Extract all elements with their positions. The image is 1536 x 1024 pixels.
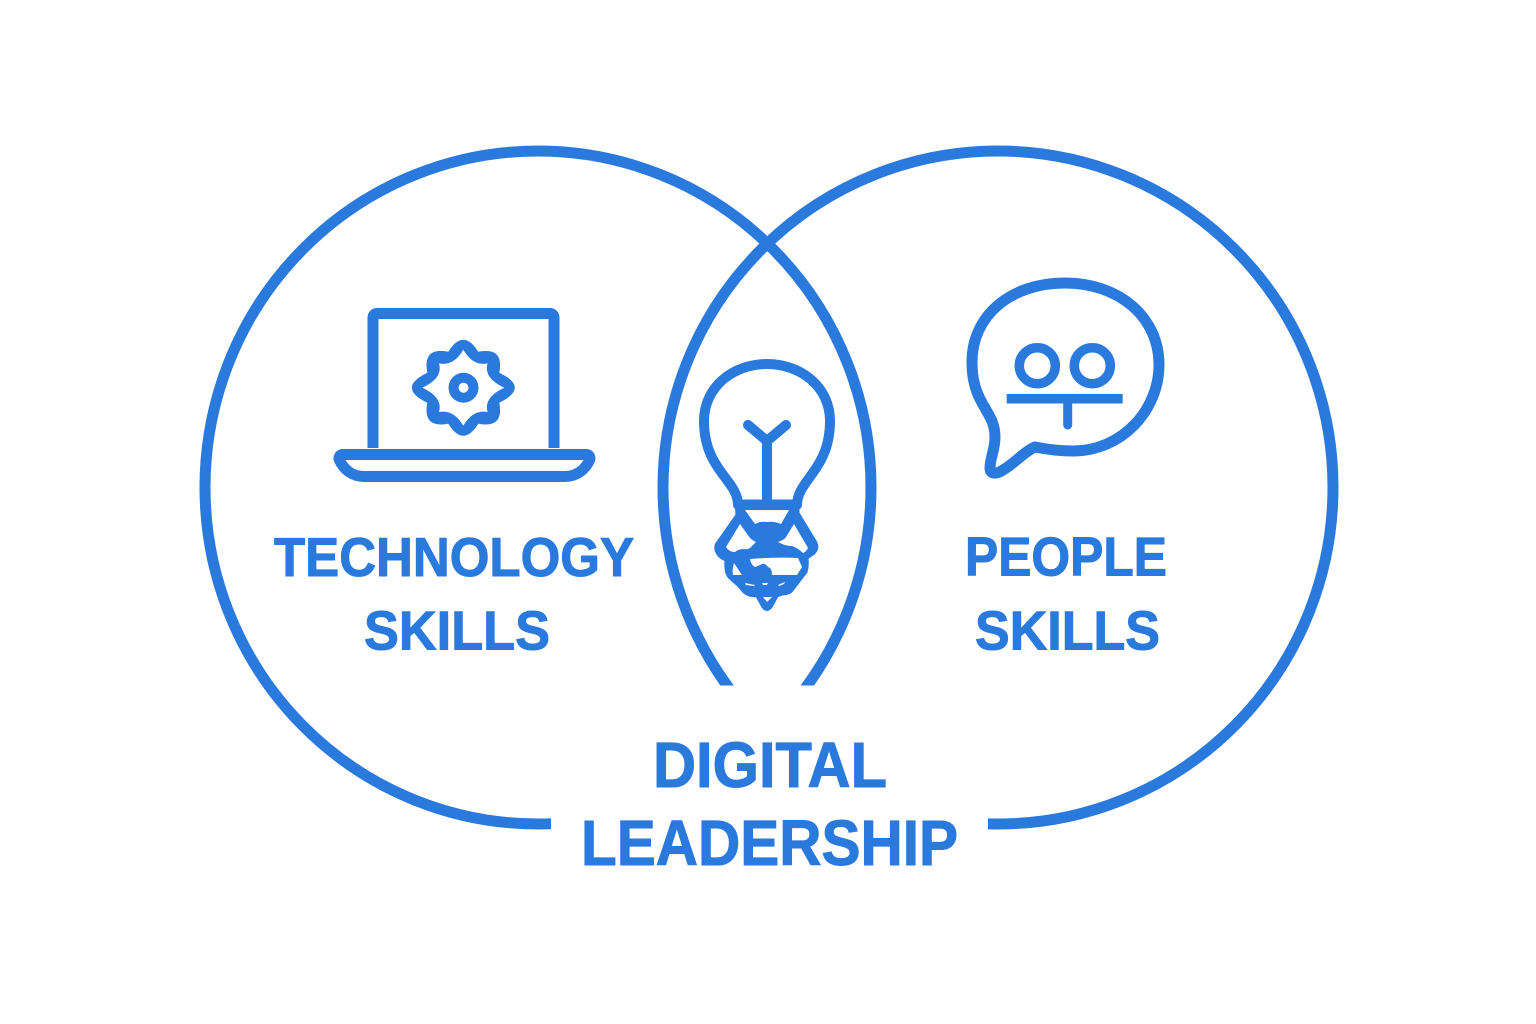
icon: speech bubble with people bbox=[972, 283, 1159, 473]
shared table bbox=[1007, 394, 1123, 403]
label: people skills: SKILLS bbox=[975, 600, 1160, 662]
label: people skills bbox=[965, 526, 1167, 662]
icon: laptop with gear bbox=[339, 314, 590, 476]
laptop base bbox=[339, 454, 590, 476]
right circle: people skills bbox=[663, 151, 1333, 824]
bulb glass bbox=[704, 364, 830, 505]
bulb base and clasped hands silhouette bbox=[716, 501, 817, 610]
label: people skills: PEOPLE bbox=[965, 526, 1167, 588]
label: technology skills bbox=[274, 526, 634, 662]
left circle: technology skills bbox=[205, 151, 871, 824]
gear bbox=[412, 340, 515, 436]
label: digital leadership: LEADERSHIP bbox=[581, 807, 958, 879]
label: technology skills: TECHNOLOGY bbox=[274, 526, 634, 588]
label: digital leadership: DIGITAL bbox=[653, 729, 887, 801]
icon: light bulb with handshake bbox=[704, 364, 830, 610]
venn diagram bbox=[200, 146, 1338, 866]
right person head bbox=[1074, 348, 1110, 384]
laptop screen bbox=[373, 314, 554, 448]
white cut-outs inside base and hands bbox=[726, 510, 808, 602]
speech bubble outline bbox=[972, 283, 1159, 473]
table stem bbox=[1063, 399, 1072, 425]
gear hub bbox=[454, 378, 474, 398]
label: digital leadership bbox=[581, 729, 958, 879]
left person head bbox=[1019, 348, 1055, 384]
filament bbox=[748, 425, 786, 505]
label: technology skills: SKILLS bbox=[364, 600, 550, 662]
